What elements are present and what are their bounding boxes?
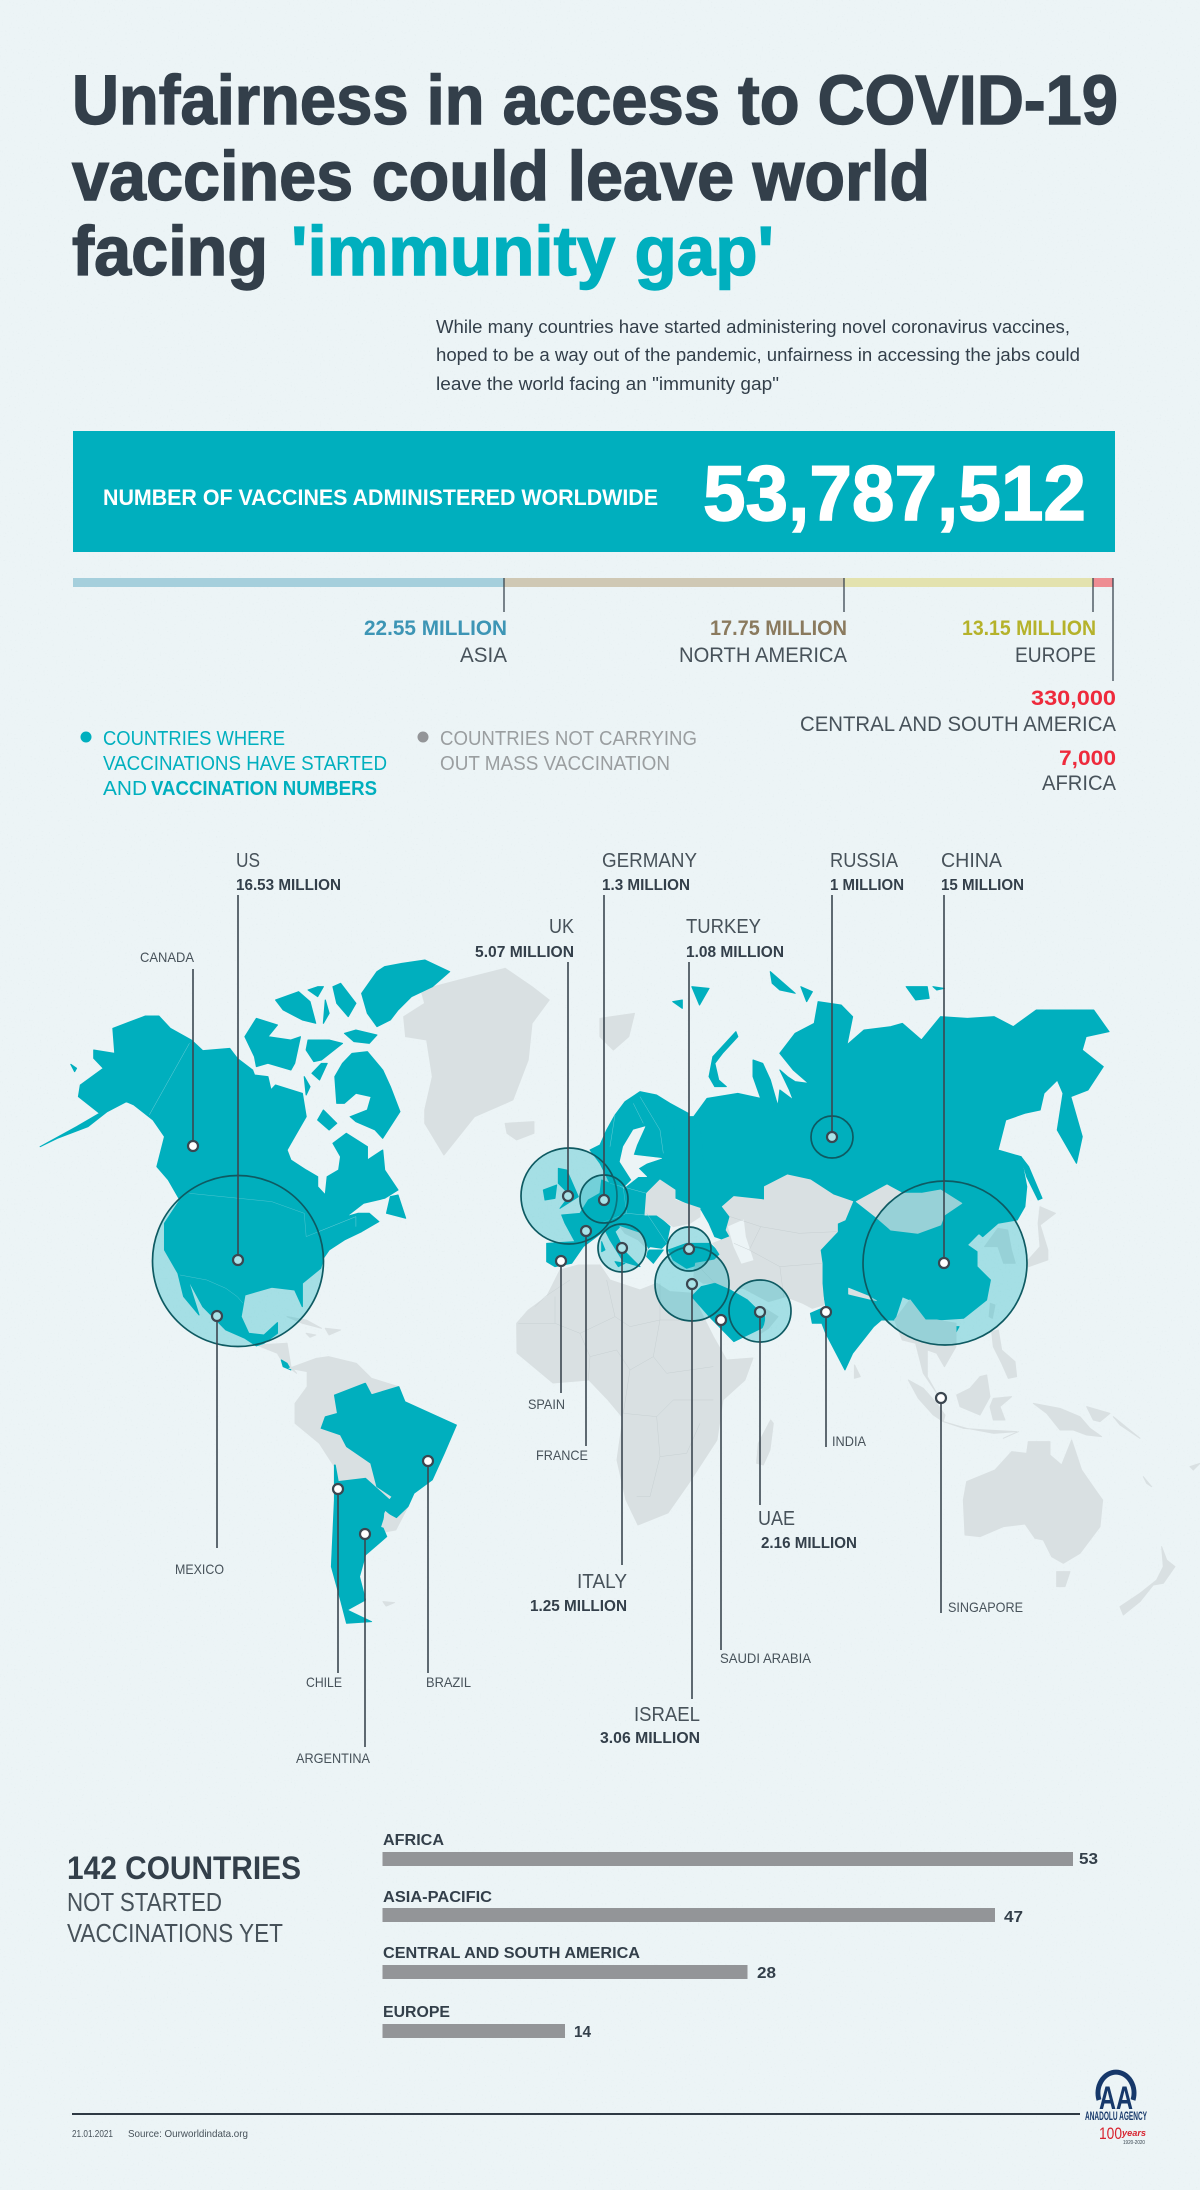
callout: Canada: CANADA xyxy=(140,949,195,965)
stacked bar: vaccines by region: CENTRAL AND SOUTH AMERICA xyxy=(800,713,1116,736)
footer rule and source: 21.01.2021 xyxy=(72,2128,113,2140)
callout: Chile: CHILE xyxy=(306,1674,342,1690)
callout: Turkey xyxy=(684,916,784,1254)
callout: China xyxy=(939,850,1024,1268)
heading: countries not started: VACCINATIONS YET xyxy=(67,1918,283,1948)
greenland, iceland and the Americas' non-vaccinating land xyxy=(256,968,549,1373)
footer rule and source xyxy=(72,2113,1080,2140)
vaccination bubbles xyxy=(152,1116,1027,1346)
stacked bar: vaccines by region: NORTH AMERICA xyxy=(679,644,847,667)
bar chart: countries by region: ASIA-PACIFIC xyxy=(383,1889,492,1906)
callout: Canada xyxy=(140,949,198,1151)
panel: worldwide total: NUMBER OF VACCINES ADMINISTERED WORLDWIDE xyxy=(103,485,658,510)
stacked bar: vaccines by region: ASIA xyxy=(460,644,507,667)
heading: countries not started: 142 COUNTRIES xyxy=(67,1850,301,1886)
title: 'immunity gap' xyxy=(291,212,774,290)
callout: Italy: ITALY xyxy=(577,1571,627,1593)
svalbard xyxy=(600,1013,634,1050)
callout: Brazil: BRAZIL xyxy=(426,1674,471,1690)
callout: Germany: GERMANY xyxy=(602,850,697,872)
callout: UK: UK xyxy=(549,916,575,938)
asia: non-vaccinating land xyxy=(692,1175,1055,1393)
callout: Argentina: ARGENTINA xyxy=(296,1750,371,1766)
bar chart: countries by region: 14 xyxy=(574,2024,591,2041)
legend: vaccinating countries: VACCINATION NUMBERS xyxy=(151,778,377,800)
callout: France: FRANCE xyxy=(536,1447,588,1463)
callout: Singapore: SINGAPORE xyxy=(948,1599,1023,1615)
callout: Spain xyxy=(528,1256,566,1412)
logo: Anadolu Agency: years xyxy=(1121,2128,1146,2138)
callout: UAE: UAE xyxy=(758,1508,795,1530)
footer rule and source: Source: Ourworldindata.org xyxy=(128,2128,248,2140)
stacked bar: vaccines by region: 330,000 xyxy=(1031,687,1116,710)
stacked bar: vaccines by region: EUROPE xyxy=(1015,644,1096,667)
callout: Germany: 1.3 MILLION xyxy=(602,877,690,894)
intro text: hoped to be a way out of the pandemic, unfairness in accessing the jabs could xyxy=(436,345,1080,365)
callout: China: CHINA xyxy=(941,850,1003,872)
africa and madagascar xyxy=(517,1265,773,1525)
stacked bar: vaccines by region: AFRICA xyxy=(1042,772,1116,795)
callout: UAE: 2.16 MILLION xyxy=(761,1535,857,1552)
callout: Turkey: TURKEY xyxy=(686,916,761,938)
eurasia: vaccinating land xyxy=(608,972,1109,1370)
callout: Mexico xyxy=(175,1311,224,1577)
callout: Brazil xyxy=(423,1456,471,1690)
callout: Argentina xyxy=(296,1529,371,1766)
title xyxy=(72,61,1118,290)
callout: Saudi Arabia: SAUDI ARABIA xyxy=(720,1650,812,1666)
callout: UAE xyxy=(755,1307,857,1552)
callout: US: US xyxy=(236,850,260,872)
legend: vaccinating countries: AND xyxy=(103,778,147,800)
legend: not vaccinating countries: OUT MASS VACCINATION xyxy=(440,753,670,775)
callout: Italy: 1.25 MILLION xyxy=(530,1598,627,1615)
stacked bar: vaccines by region xyxy=(73,578,1116,795)
intro text: leave the world facing an "immunity gap" xyxy=(436,374,779,394)
bar chart: countries by region: EUROPE xyxy=(383,2004,450,2021)
logo: Anadolu Agency: 100 xyxy=(1099,2124,1122,2143)
callout: US xyxy=(233,850,341,1265)
logo: Anadolu Agency: 1920-2020 xyxy=(1123,2140,1145,2146)
callout: Russia: RUSSIA xyxy=(830,850,899,872)
stacked bar: vaccines by region: 17.75 MILLION xyxy=(710,617,847,640)
legend: not vaccinating countries: COUNTRIES NOT CARRYING xyxy=(440,728,697,750)
legend: not vaccinating countries xyxy=(418,728,697,775)
callout: Italy xyxy=(530,1243,627,1615)
callout: Chile xyxy=(306,1484,343,1690)
callout: Israel: 3.06 MILLION xyxy=(600,1730,700,1747)
intro text: While many countries have started administering novel coronavirus vaccines, xyxy=(436,317,1070,337)
callout: France xyxy=(536,1226,591,1463)
callout: Russia: 1 MILLION xyxy=(830,877,904,894)
callout: US: 16.53 MILLION xyxy=(236,877,341,894)
callout: India: INDIA xyxy=(832,1433,867,1449)
bar chart: countries by region xyxy=(382,1832,1098,2041)
callout: India xyxy=(821,1307,867,1449)
panel: worldwide total xyxy=(73,431,1115,552)
callout: Mexico: MEXICO xyxy=(175,1561,224,1577)
callout: Saudi Arabia xyxy=(716,1315,812,1666)
north america xyxy=(40,960,450,1370)
callout: Israel: ISRAEL xyxy=(634,1704,700,1726)
bar chart: countries by region: CENTRAL AND SOUTH AMERICA xyxy=(383,1945,640,1962)
bar chart: countries by region: AFRICA xyxy=(383,1832,444,1849)
bar chart: countries by region: 28 xyxy=(757,1965,776,1982)
legend: vaccinating countries: VACCINATIONS HAVE STARTED xyxy=(103,753,387,775)
callout: UK: 5.07 MILLION xyxy=(475,944,574,961)
bar chart: countries by region: 53 xyxy=(1079,1851,1098,1868)
southeast asia and oceania xyxy=(908,1330,1200,1615)
legend: vaccinating countries xyxy=(80,728,387,800)
title: Unfairness in access to COVID-19 xyxy=(72,61,1118,139)
south america xyxy=(289,1357,456,1623)
logo: Anadolu Agency xyxy=(1085,2072,1147,2146)
callout: China: 15 MILLION xyxy=(941,877,1024,894)
legend: vaccinating countries: COUNTRIES WHERE xyxy=(103,728,285,750)
heading: countries not started xyxy=(67,1850,301,1948)
callout: Russia xyxy=(827,850,904,1142)
europe: vaccinating land xyxy=(543,1092,720,1268)
stacked bar: vaccines by region: 22.55 MILLION xyxy=(364,617,507,640)
callout: UK xyxy=(475,916,575,1201)
panel: worldwide total: 53,787,512 xyxy=(703,449,1086,537)
logo: Anadolu Agency: ANADOLU AGENCY xyxy=(1085,2111,1147,2123)
callout: Turkey: 1.08 MILLION xyxy=(686,944,784,961)
callout: Singapore xyxy=(936,1393,1023,1615)
stacked bar: vaccines by region: 7,000 xyxy=(1059,747,1116,770)
callout: Germany xyxy=(599,850,697,1205)
title: facing xyxy=(72,212,268,290)
heading: countries not started: NOT STARTED xyxy=(67,1887,222,1917)
logo: Anadolu Agency: AA xyxy=(1099,2080,1133,2116)
title: vaccines could leave world xyxy=(72,137,930,215)
world map xyxy=(40,960,1200,1623)
intro text xyxy=(436,317,1080,394)
stacked bar: vaccines by region: 13.15 MILLION xyxy=(962,617,1096,640)
callout: Israel xyxy=(600,1279,700,1747)
bar chart: countries by region: 47 xyxy=(1004,1909,1023,1926)
callout: Spain: SPAIN xyxy=(528,1396,565,1412)
